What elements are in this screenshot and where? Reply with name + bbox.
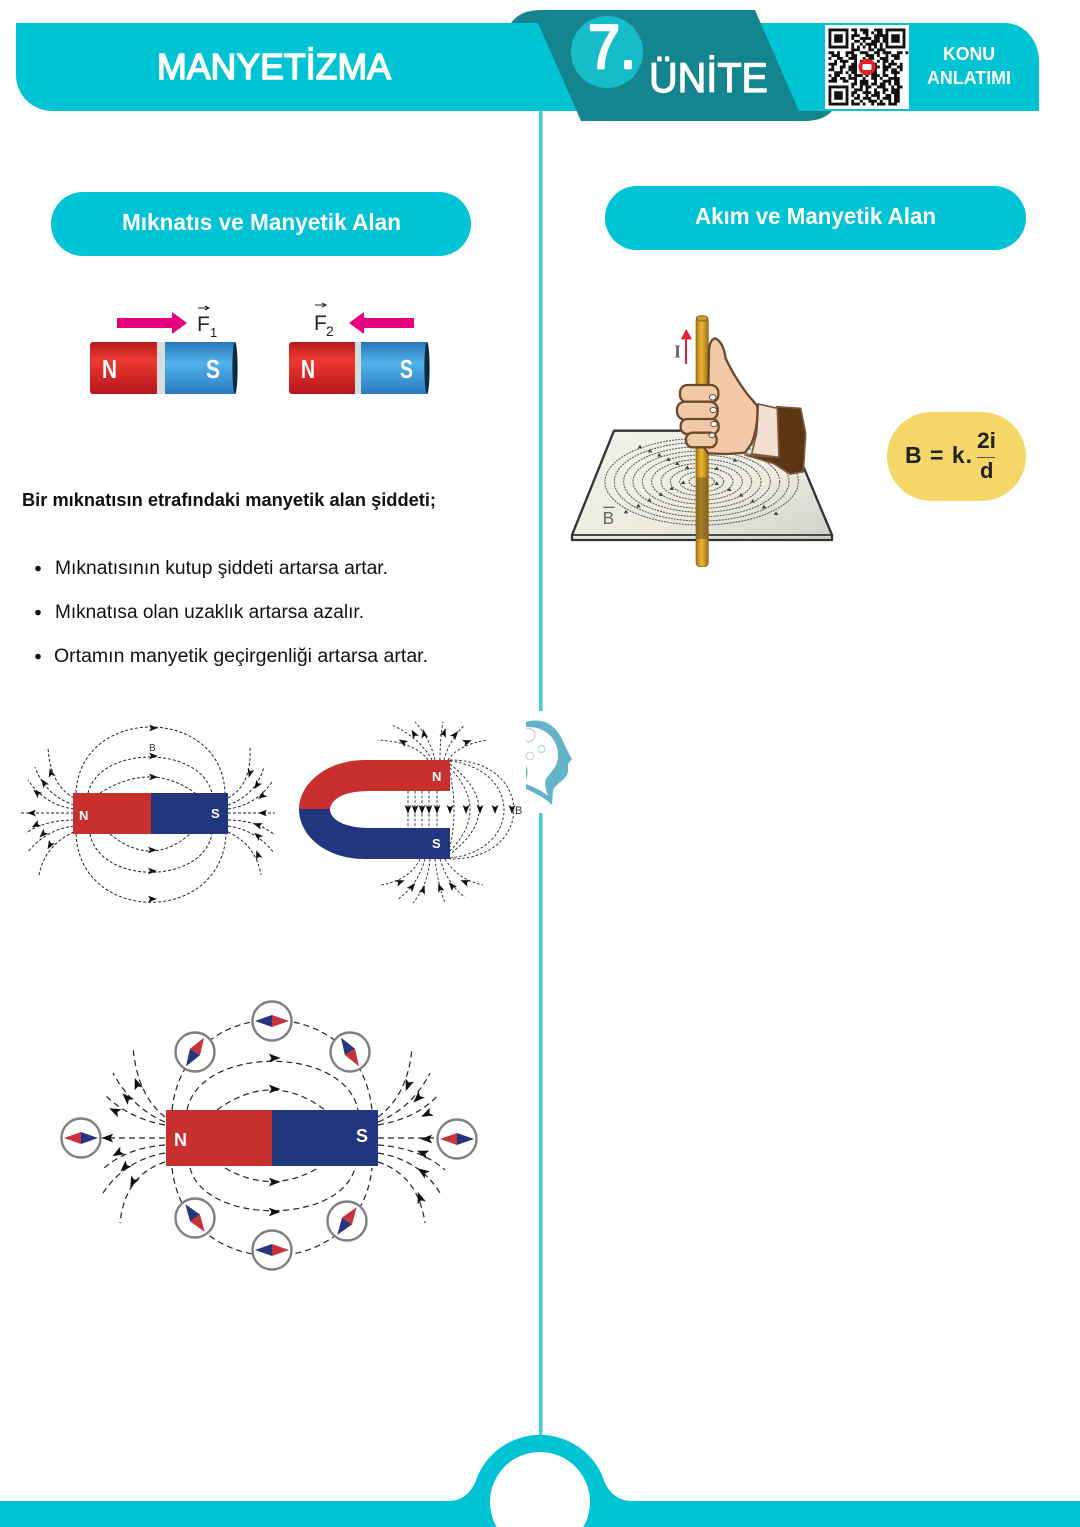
label: I: I [674,341,681,361]
section label: KONU [943,44,995,64]
diagram: bar magnet field [21,725,275,902]
diagram: horseshoe magnet field [299,722,522,903]
footer band with arch [0,1435,1080,1527]
center divider line [539,111,542,1441]
magnet one [90,342,238,394]
bullet three: Ortamın manyetik geçirgenliği artarsa artar. [54,646,428,667]
formula badge: 2i [977,428,996,453]
field arrowheads [395,727,515,895]
diagram: compasses around bar magnet [62,1002,476,1270]
header teal bar right [745,23,1039,111]
field lines [21,727,275,902]
heading pill: magnet: Mıknatıs ve Manyetik Alan [122,209,401,235]
hand [677,338,757,454]
bullet two: Mıknatısa olan uzaklık artarsa azalır. [55,602,364,623]
magnet two: N [301,354,315,384]
pole labels: N [432,769,441,784]
unit number badge: 7. [588,13,636,82]
compass: lower right [328,1202,366,1240]
heading pill: current [605,186,1026,250]
magnet two [289,342,430,394]
field lines [102,1020,445,1256]
compass: top [252,1002,292,1040]
diagram: magnets with forces [90,303,430,394]
bullet list [35,558,428,667]
magnet: N [79,808,88,823]
arrowheads [27,725,267,902]
formula badge [887,412,1026,501]
fingers [677,385,719,447]
magnet one: S [206,354,220,384]
label: F2: F [314,312,327,335]
bullet one: Mıknatısının kutup şiddeti artarsa artar. [55,558,388,579]
magnet: red north arm [299,760,450,809]
header banner [16,10,1039,121]
label: F1: F [197,313,210,336]
label: B vector: B [603,508,614,528]
concentric field lines [605,438,798,525]
logo: head silhouette [526,711,576,813]
header teal bar left [16,23,585,111]
magnet two: S [400,354,413,384]
unit label: ÜNİTE [649,54,768,101]
compass: bottom [252,1230,292,1270]
palm and thumb [703,338,757,454]
header dark unit tab [511,10,832,121]
cuff [752,404,779,457]
plate [572,431,832,540]
pole labels: S [432,836,441,851]
heading pill: current: Akım ve Manyetik Alan [695,203,936,229]
compass: lower left [176,1198,214,1238]
heading pill: magnet [51,192,471,256]
diagram: right hand rule [572,316,832,567]
section label: ANLATIMI [927,68,1011,88]
compass: upper left [176,1032,214,1072]
magnet: N [174,1130,187,1150]
field arrowheads [624,445,778,515]
pole field lines [378,722,514,903]
compass: right [438,1120,476,1158]
label: B: B [515,805,522,817]
magnet one: N [102,354,117,384]
magnet: S [211,806,220,821]
arrow: force two [349,312,414,334]
text: lead sentence: Bir mıknatısın etrafındaki manyetik alan şiddeti; [22,490,436,510]
formula badge: d [980,458,993,483]
magnet [73,793,228,834]
QR code [825,25,909,109]
label: F2: 2 [326,323,334,339]
section label [927,44,1011,88]
arrowheads [102,1054,434,1216]
pole labels [432,769,441,851]
unit number badge [571,13,643,88]
label: F1 [197,306,217,340]
compass: left [62,1118,100,1158]
label: B: B [149,743,156,754]
rod [696,316,708,567]
finger nails [709,395,717,438]
sleeve [745,407,806,474]
label: F2 [314,303,334,339]
compass: upper right [330,1032,370,1072]
magnet: blue south arm [299,809,450,859]
current arrow [681,329,692,364]
magnet [166,1110,378,1166]
arrow: force one [117,312,187,334]
title: MANYETİZMA [157,46,391,87]
label: F1: 1 [210,325,217,340]
formula badge: B = k. [905,442,972,468]
magnet: S [356,1126,368,1146]
